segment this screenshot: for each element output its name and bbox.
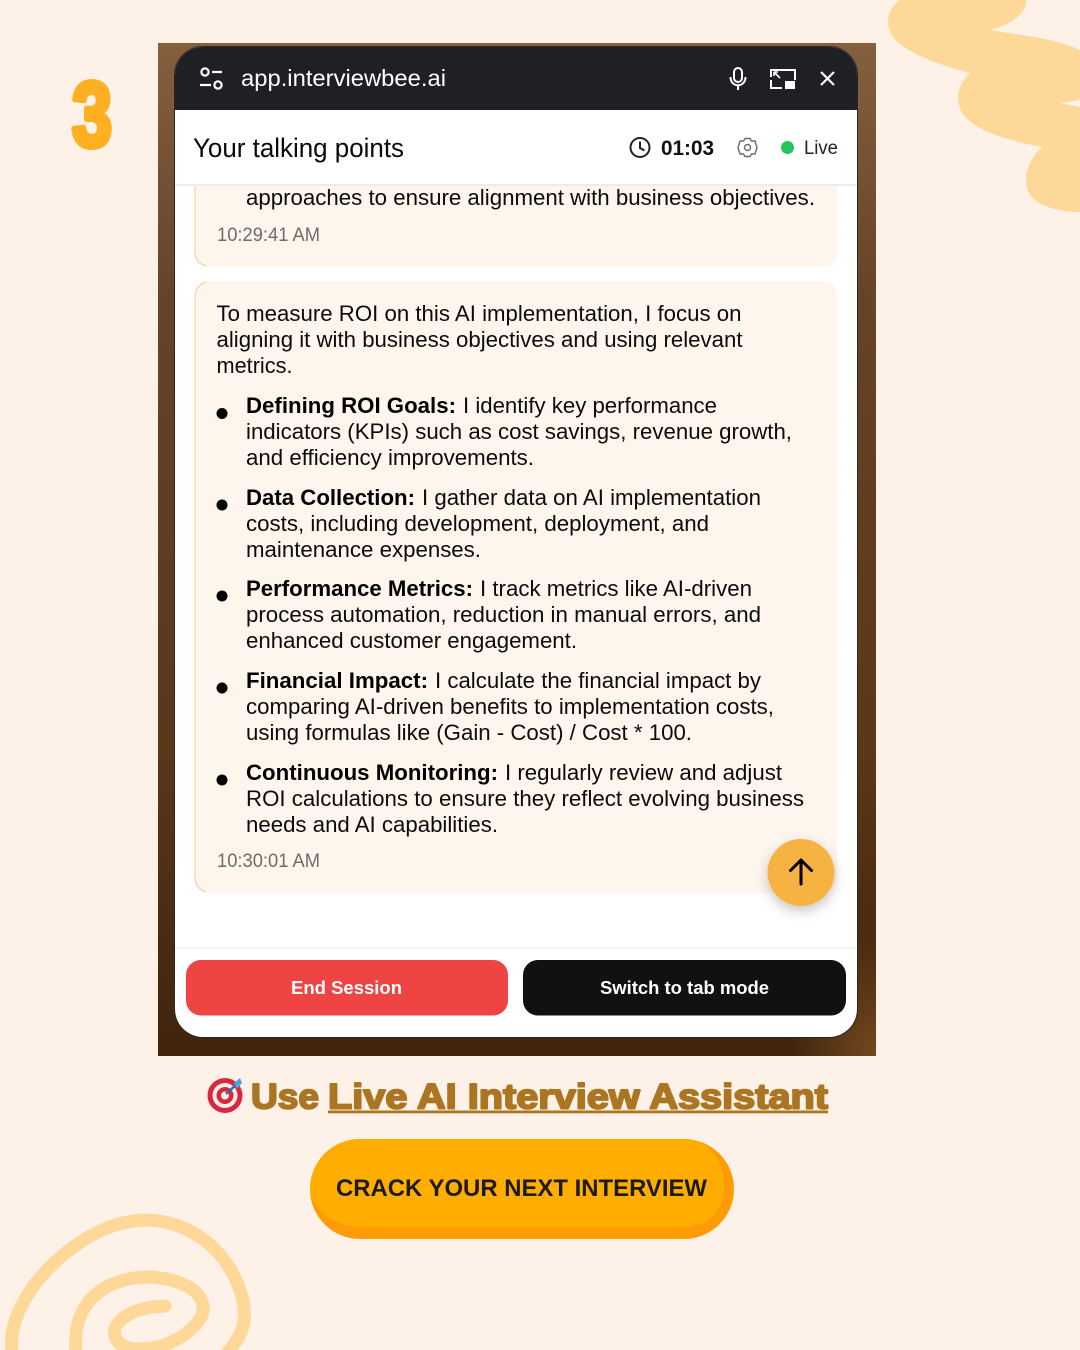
message card 1: [195, 185, 837, 267]
heading: use live AI interview assistant: Live AI Interview Assistant: [328, 1078, 828, 1116]
bullet: continuous monitoring: Continuous Monitoring:: [246, 760, 498, 785]
url: app.interviewbee.ai: [241, 65, 446, 91]
call-to-action button: CRACK YOUR NEXT INTERVIEW: [336, 1175, 708, 1202]
bullet: continuous monitoring: needs and AI capabilities.: [246, 812, 498, 837]
step number 3: 3: [72, 64, 112, 166]
intro paragraph: [217, 305, 742, 373]
panel header: [175, 137, 857, 186]
live indicator: [781, 140, 838, 154]
screenshot backdrop: [158, 43, 876, 1056]
bullet: data collection: maintenance expenses.: [246, 537, 481, 562]
live indicator: Live: [804, 137, 838, 159]
bullet: data collection: [216, 485, 761, 562]
message card 1: 10:29:41 AM: [217, 224, 320, 246]
button: end session: [186, 960, 508, 1016]
decorative spiral: bottom left: [11, 1220, 244, 1350]
decorative blob: top right: [888, 0, 1080, 212]
icon: close: [821, 72, 834, 85]
bullet: defining ROI goals: [216, 393, 792, 470]
bullet: performance metrics: [216, 576, 761, 653]
bullet: financial impact: [216, 668, 774, 745]
icon: clock: [630, 138, 650, 157]
button: end session: End Session: [291, 977, 402, 998]
bullet: performance metrics: I track metrics like AI-driven: [480, 576, 752, 601]
bullet: financial impact: Financial Impact:: [246, 668, 428, 693]
button: switch to tab mode: [523, 960, 846, 1016]
bullet: continuous monitoring: ROI calculations to ensure they reflect evolving business: [246, 786, 804, 811]
call-to-action button: [310, 1139, 734, 1239]
bullet: continuous monitoring: I regularly review and adjust: [505, 760, 783, 785]
bullet: financial impact: comparing AI-driven benefits to implementation costs,: [246, 694, 774, 719]
bullet: performance metrics: Performance Metrics:: [246, 576, 473, 601]
title bar: [175, 47, 857, 110]
timestamp: 10:30:01 AM: [217, 850, 320, 872]
timer: 01:03: [661, 137, 714, 160]
bullet: data collection: I gather data on AI implementation: [422, 485, 761, 510]
app window: [174, 46, 858, 1038]
intro paragraph: metrics.: [216, 353, 292, 378]
bullet: continuous monitoring: [216, 760, 804, 837]
icon: microphone: [730, 68, 746, 90]
intro paragraph: aligning it with business objectives and using relevant: [216, 327, 743, 352]
bullet: defining ROI goals: indicators (KPIs) such as cost savings, revenue growth,: [246, 419, 792, 444]
footer divider: [175, 947, 857, 948]
icon: settings gear: [738, 138, 757, 156]
bullet: financial impact: I calculate the financial impact by: [435, 668, 762, 693]
bullet: defining ROI goals: and efficiency improvements.: [246, 445, 534, 470]
bullet: defining ROI goals: I identify key performance: [463, 393, 717, 418]
panel header: Your talking points: [193, 133, 404, 163]
bullet: data collection: costs, including development, deployment, and: [246, 511, 709, 536]
bullet: performance metrics: process automation, reduction in manual errors, and: [246, 602, 761, 627]
icon: sliders: [200, 68, 222, 89]
message card 2: [195, 281, 837, 893]
icon: picture in picture: [771, 70, 795, 89]
button: switch to tab mode: Switch to tab mode: [600, 977, 769, 998]
bullet: performance metrics: enhanced customer engagement.: [246, 628, 577, 653]
heading: use live AI interview assistant: Use: [251, 1078, 319, 1116]
message card 1: approaches to ensure alignment with business objectives.: [246, 185, 815, 210]
bullet: data collection: Data Collection:: [246, 485, 415, 510]
scroll-to-top button: [768, 839, 834, 906]
icon: target with dart: [208, 1078, 242, 1113]
bullet: financial impact: using formulas like (Gain - Cost) / Cost * 100.: [246, 720, 692, 745]
bullet: defining ROI goals: Defining ROI Goals:: [246, 393, 456, 418]
intro paragraph: To measure ROI on this AI implementation, I focus on: [216, 301, 742, 326]
